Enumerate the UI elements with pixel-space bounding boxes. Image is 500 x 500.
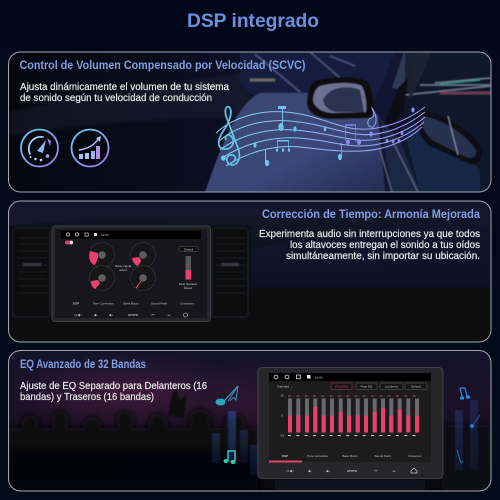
heading: time correction: Corrección de Tiempo: Armonía Mejorada [262, 209, 481, 221]
tab labels: Crossover [408, 454, 422, 458]
preset buttons: Rear EQ [361, 384, 373, 388]
device reflection [275, 480, 425, 490]
default button and level bar [179, 246, 198, 290]
treble clef [219, 107, 239, 165]
control row: ATOTO [128, 313, 139, 317]
control row: ◀+ [326, 469, 331, 473]
heading: SCVC: Control de Volumen Compensado por Velocidad (SCVC) [20, 60, 306, 72]
default button and level bar: Default [184, 247, 193, 251]
music staff with notes [216, 107, 425, 166]
text block: time correction description [259, 229, 480, 262]
EQ bar chart: -10 [280, 434, 284, 438]
text block: time correction description: simultáneamente, sin importar su ubicación. [286, 251, 480, 262]
control row [286, 468, 417, 473]
default button and level bar: Rear Speaker [179, 282, 197, 286]
tab labels: Sound Field [374, 454, 391, 458]
text block: EQ description: bandas) y Traseros (16 bandas) [20, 392, 154, 403]
tab labels: Crossover [180, 302, 194, 306]
photo: car dashboard [9, 220, 490, 342]
text block: time correction description: Experimenta audio sin interrupciones ya que todos [259, 229, 480, 240]
panel border [8, 201, 491, 342]
tab labels: DSP [73, 302, 79, 306]
tab labels: Bass Boost [123, 302, 139, 306]
tab labels: DSP [282, 454, 288, 458]
panel: 32-band EQ [5, 350, 491, 491]
tab labels [73, 302, 194, 304]
device: head unit with delay screen: 16:50 [101, 233, 109, 237]
preset buttons: Default [411, 384, 421, 388]
control row: ⏮ [375, 469, 378, 473]
delay gauges [89, 242, 156, 290]
control row: ⏭ [168, 313, 171, 317]
control row: ◀+ [109, 313, 114, 317]
title: DSP integrado [187, 10, 319, 32]
heading: EQ: EQ Avanzado de 32 Bandas [20, 359, 146, 371]
text block: SCVC description: de sonido según tu velocidad de conducción [20, 93, 212, 104]
panel border [8, 52, 491, 192]
control row: ⏻/◀× [286, 469, 294, 473]
text block: EQ description: Ajuste de EQ Separado para Delanteros (16 [20, 381, 207, 392]
right mirror [416, 110, 482, 164]
tab labels: Time Correction [307, 454, 328, 458]
device: head unit with EQ screen: 16:50 [315, 376, 323, 380]
tab labels: Bass Boost [342, 454, 358, 458]
text block: SCVC description [20, 82, 229, 104]
control row: ⏻/◀× [74, 313, 82, 317]
tab labels: Time Correction [92, 302, 114, 306]
preset buttons: Front EQ [335, 384, 348, 388]
tab labels [282, 455, 422, 457]
control row: ATOTO [347, 469, 358, 473]
preset buttons: Standard ⌄ [277, 384, 293, 388]
panel: time correction [8, 201, 491, 342]
device: head unit with delay screen: Delay signal [115, 264, 132, 268]
icon: rising volume bars [72, 130, 108, 166]
EQ bar chart: 10 [280, 394, 284, 398]
control row: ◀− [94, 313, 99, 317]
tab labels: Sound Field [151, 302, 167, 306]
control row: ◀− [308, 469, 313, 473]
control row [74, 313, 188, 317]
preset buttons [277, 383, 427, 390]
device: head unit with delay screen: output [119, 268, 127, 272]
left air vent [13, 228, 50, 317]
photo: concert crowd [5, 352, 491, 491]
active tab underline [269, 460, 302, 462]
device: head unit with EQ screen [258, 368, 443, 478]
music notes [253, 106, 342, 166]
icon: speedometer [21, 130, 58, 166]
text block: SCVC description: Ajusta dinámicamente el volumen de tu sistema [20, 82, 229, 93]
panel border [8, 350, 491, 491]
icon: music notes [216, 386, 480, 464]
default button and level bar: Mixed [184, 286, 192, 290]
right air vent [212, 228, 248, 317]
preset buttons: Loudness [385, 384, 399, 388]
car A-pillar [385, 78, 408, 130]
text block: EQ description [20, 381, 207, 403]
equalizer light bars [212, 400, 478, 475]
text block: time correction description: los altavoces entregan el sonido a tus oídos [290, 240, 480, 251]
control row: ⏮ [152, 313, 155, 317]
EQ bar chart: 0 [281, 414, 283, 418]
EQ bar chart [280, 394, 419, 438]
photo: car side mirror [205, 52, 491, 192]
device: head unit with delay screen [52, 226, 210, 322]
control row: ⏭ [393, 469, 396, 473]
panel: speed compensated volume control [8, 52, 491, 192]
left mirror [307, 77, 373, 119]
